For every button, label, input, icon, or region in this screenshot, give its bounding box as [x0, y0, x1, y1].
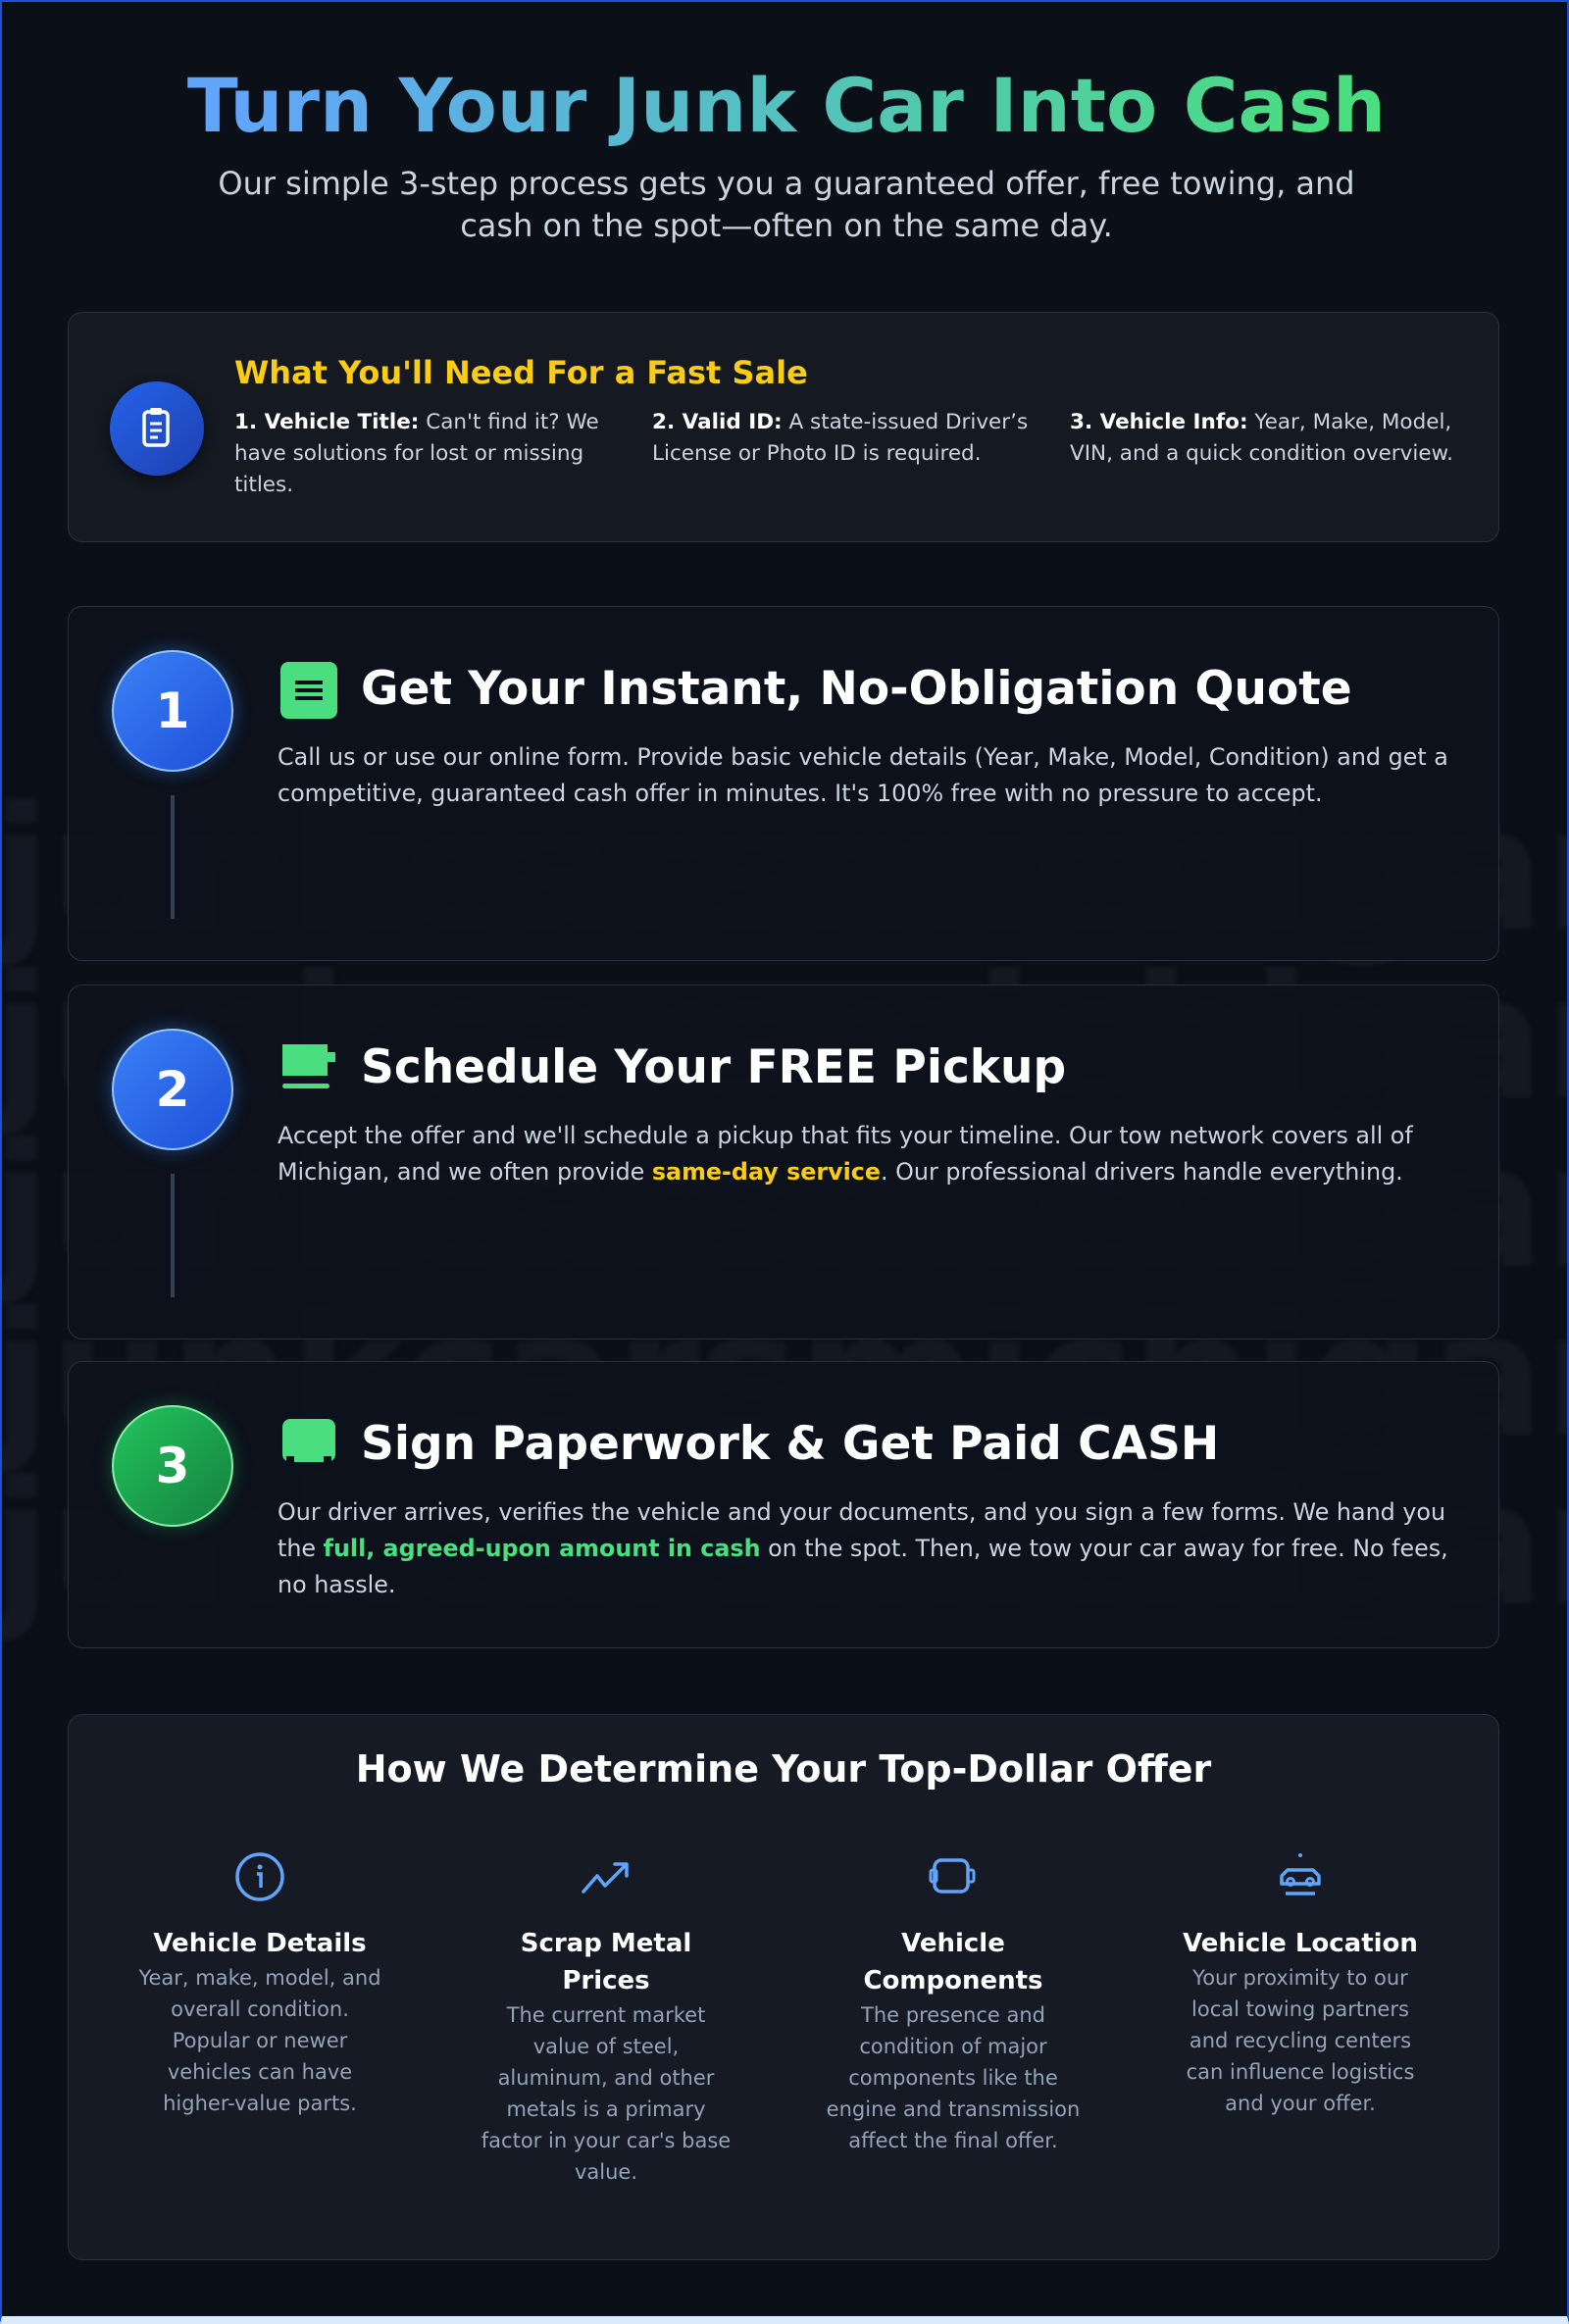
panel: step 1: [68, 606, 1499, 961]
heading: What You'll Need For a Fast Sale: [234, 354, 808, 391]
panel: step 3: [68, 1361, 1499, 1648]
factor: vehicle details: [138, 1852, 381, 2115]
factor: components: Vehicle Components: [863, 1929, 1043, 1996]
factor: components: The presence and condition of major components like the engine and transmission affect the final offer.: [827, 2003, 1080, 2152]
subtitle: Our simple 3-step process gets you a guaranteed offer, free towing, and cash on the spot—often on the same day.: [218, 165, 1355, 244]
watermark background text: [0, 771, 1569, 1644]
factor: vehicle details: Year, make, model, and overall condition. Popular or newer vehicles can have higher-value parts.: [138, 1966, 381, 2115]
icon: pickup: [282, 1044, 335, 1088]
factor: scrap metal: [481, 1862, 731, 2184]
factor: vehicle details: Vehicle Details: [153, 1929, 367, 1958]
icon: form: [280, 662, 337, 719]
step heading: Sign Paperwork & Get Paid CASH: [361, 1417, 1219, 1471]
step number 2: [112, 1029, 233, 1150]
factor: scrap metal: Scrap Metal Prices: [521, 1929, 691, 1996]
step number 3: 3: [156, 1438, 189, 1494]
factor: location: Vehicle Location: [1183, 1929, 1418, 1958]
step body: Call us or use our online form. Provide basic vehicle details (Year, Make, Model, Condition) and get a competitive, guaranteed cash offer in minutes. It's 100% free with no pressure to accept.: [278, 743, 1448, 807]
factor: scrap metal: The current market value of steel, aluminum, and other metals is a primary factor in your car's base value.: [481, 2003, 731, 2184]
item 2: 2. Valid ID: A state-issued Driver’s License or Photo ID is required.: [652, 410, 1028, 466]
factor: location: [1183, 1853, 1418, 2115]
panel: step 2: [68, 985, 1499, 1339]
item 1: 1. Vehicle Title: Can't find it? We have solutions for lost or missing titles.: [234, 410, 599, 497]
icon: clipboard: [110, 381, 204, 476]
step body: Our driver arrives, verifies the vehicle and your documents, and you sign a few forms. We hand you the full, agreed-upon amount in cash on the spot. Then, we tow your car away for free. No fees, no hassle.: [278, 1498, 1448, 1598]
step heading: Get Your Instant, No-Obligation Quote: [361, 662, 1352, 716]
factor: components: [827, 1858, 1080, 2152]
item 3: 3. Vehicle Info: Year, Make, Model, VIN, and a quick condition overview.: [1070, 410, 1453, 466]
step number 3: [112, 1405, 233, 1527]
heading: How We Determine Your Top-Dollar Offer: [356, 1747, 1211, 1791]
panel: offer factors: [68, 1714, 1499, 2260]
step number 2: 2: [156, 1061, 189, 1118]
panel: requirements: [68, 312, 1499, 542]
icon: cash truck: [282, 1419, 335, 1462]
factor: location: Your proximity to our local towing partners and recycling centers can influence logistics and your offer.: [1187, 1966, 1414, 2115]
title: Turn Your Junk Car Into Cash: [187, 62, 1386, 149]
step heading: Schedule Your FREE Pickup: [361, 1040, 1066, 1094]
step body: Accept the offer and we'll schedule a pickup that fits your timeline. Our tow network covers all of Michigan, and we often provide same-day service. Our professional drivers handle everything.: [278, 1122, 1413, 1186]
step number 1: 1: [156, 682, 189, 739]
step number 1: [112, 650, 233, 772]
